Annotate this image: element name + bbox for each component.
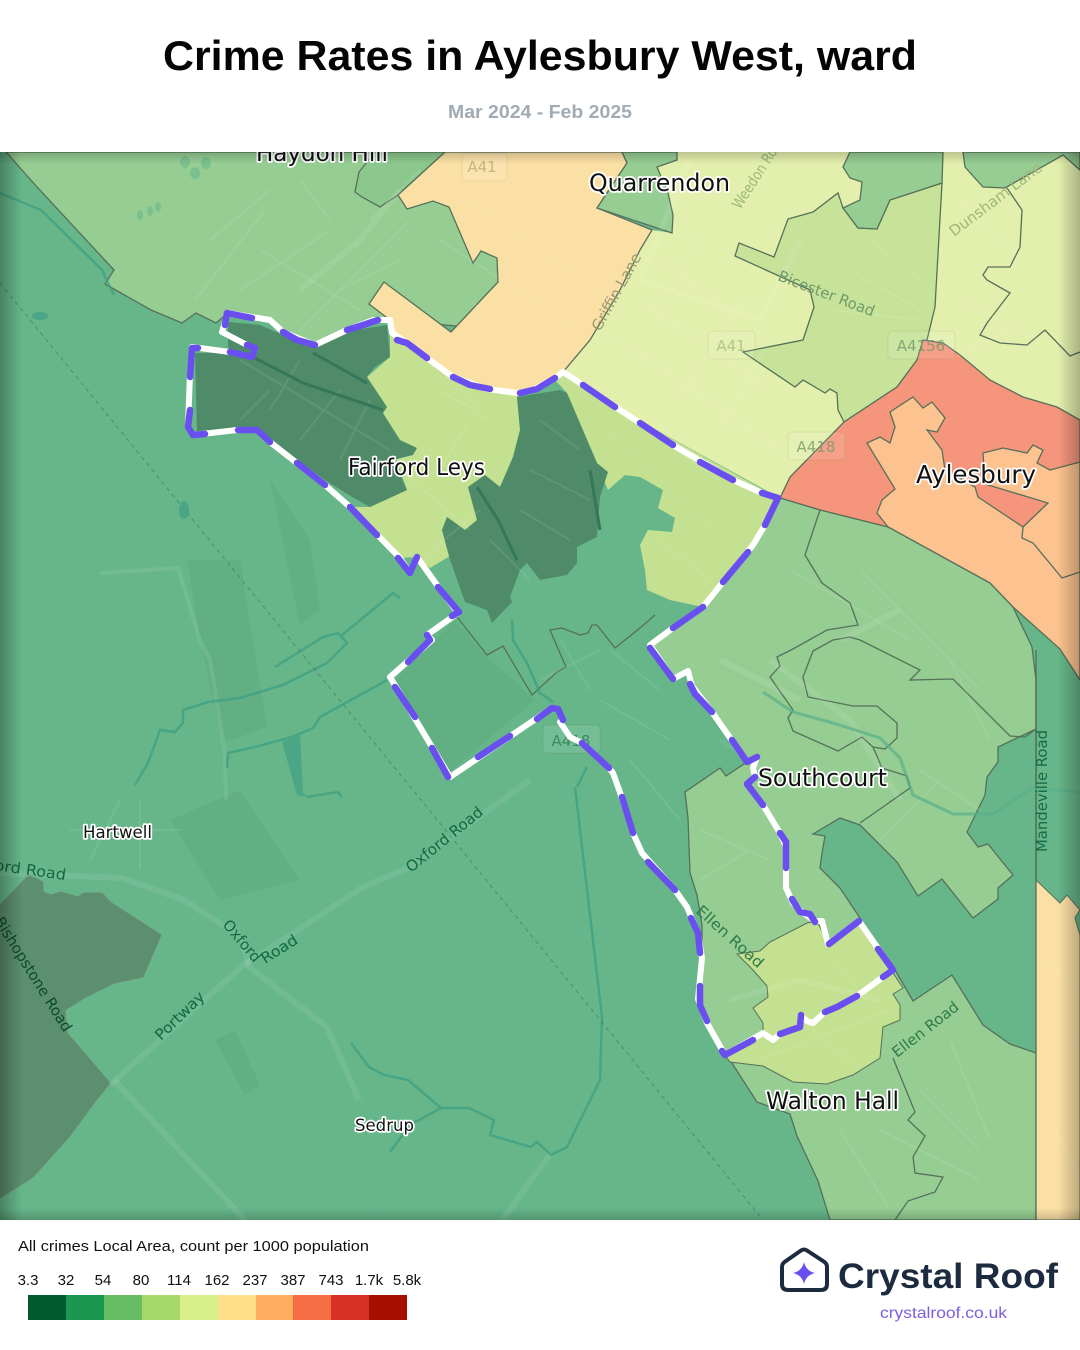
area: far south-west dark patch (0, 875, 161, 1198)
area: Southcourt inner boundaries (457, 510, 1036, 1220)
place labels: Southcourt (758, 764, 887, 792)
streets (70, 160, 1080, 1210)
road names: Ellen Road (692, 902, 768, 972)
area: Quarrendon north amber (369, 152, 652, 395)
subtle fields (170, 480, 535, 1095)
area: Quarrendon green patch (597, 152, 677, 233)
legend colour scale (28, 1295, 407, 1320)
area: eastern amber strip (1036, 880, 1080, 1220)
creek inside dark areas (253, 353, 600, 560)
road names: Mandeville Road (1033, 730, 1051, 852)
Southcourt river (763, 692, 1080, 814)
area: north mid-green (6, 152, 500, 345)
legend tick labels: 743 (318, 1272, 344, 1289)
area: Fairford Leys light green (350, 335, 520, 568)
road shield labels (467, 158, 945, 750)
legend tick labels: 1.7k (355, 1272, 384, 1289)
area: low-rate dark east (442, 390, 608, 623)
road names: Ellen Road (888, 998, 963, 1061)
place labels: Walton Hall (766, 1087, 899, 1115)
road names: Portway (151, 988, 208, 1044)
title: Crime Rates in Aylesbury West, ward (163, 32, 917, 79)
place labels: Haydon Hill (256, 141, 388, 167)
area: north-east corner green (963, 152, 1080, 188)
area: Southcourt east green (813, 729, 1036, 1053)
road shield labels: A418 (552, 732, 590, 750)
area: Aylesbury red (780, 339, 1080, 526)
road names: Griffin Lane (588, 250, 645, 334)
road shields (462, 153, 955, 753)
website: crystalroof.co.uk (880, 1305, 1008, 1322)
legend tick labels: 5.8k (393, 1272, 422, 1289)
date range subtitle: Mar 2024 - Feb 2025 (448, 102, 632, 122)
road names: Bicester Road (776, 267, 877, 320)
road shield labels: A418 (797, 438, 835, 456)
road shield labels: A4156 (897, 337, 945, 355)
road shield labels: A41 (467, 158, 497, 176)
road names (0, 131, 1051, 1061)
legend title: All crimes Local Area, count per 1000 population (18, 1238, 369, 1255)
area: Aylesbury orange (867, 397, 1080, 680)
major roads (0, 160, 900, 1220)
brand name: Crystal Roof (838, 1257, 1058, 1296)
legend tick labels (18, 1272, 422, 1289)
legend tick labels: 32 (58, 1272, 74, 1289)
road names: Weedon Road (728, 131, 790, 212)
place labels: Aylesbury (916, 460, 1036, 489)
area: north darker green wedge (355, 152, 445, 207)
legend tick labels: 80 (133, 1272, 149, 1289)
road names: Road (258, 931, 301, 967)
place labels (83, 141, 1036, 1136)
legend tick labels: 114 (167, 1272, 191, 1289)
area: low-rate dark west (195, 322, 417, 507)
area: north green patch (843, 152, 943, 229)
place labels: Quarrendon (589, 169, 730, 197)
ward boundary (188, 313, 893, 1055)
legend tick labels: 162 (204, 1272, 230, 1289)
legend tick labels: 3.3 (18, 1272, 38, 1289)
map edge shading (0, 152, 1080, 1220)
rivers and streams (0, 193, 602, 1155)
road shield labels: A41 (716, 337, 746, 355)
legend tick labels: 54 (95, 1272, 111, 1289)
logo: Crystal Roof (782, 1250, 1058, 1322)
place labels: Hartwell (83, 823, 152, 843)
road names: Dunsham Lane (946, 158, 1046, 240)
area: north-east pale yellow (563, 152, 1080, 498)
place labels: Sedrup (355, 1116, 414, 1136)
road names: Oxford (219, 916, 265, 966)
road names: Oxford Road (402, 803, 487, 876)
railway (0, 283, 763, 1220)
area: Southcourt mid-green (650, 498, 1036, 1220)
icon: house with star (782, 1250, 827, 1290)
area: east-of-centre light green (555, 372, 778, 607)
legend tick labels: 237 (242, 1272, 268, 1289)
place labels: Fairford Leys (348, 455, 485, 481)
legend (18, 1238, 422, 1320)
area: Walton Hall light green (725, 921, 903, 1084)
area: Bicester Road light green (735, 183, 942, 422)
ponds (32, 156, 307, 797)
legend tick labels: 387 (280, 1272, 306, 1289)
